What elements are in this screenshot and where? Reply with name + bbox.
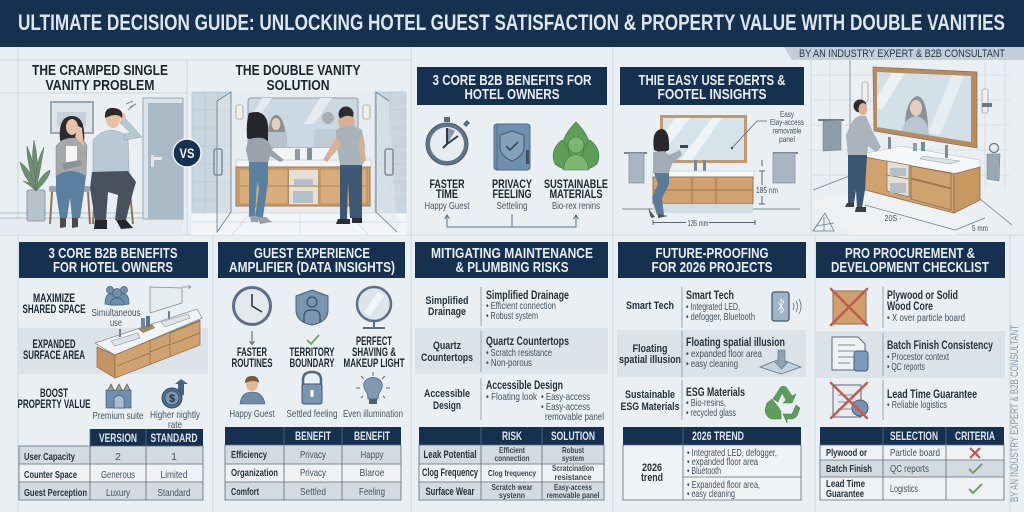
row: accessible design: • Floating look [486,391,538,403]
row: plywood core [887,288,965,324]
callout: removable panel: panel [779,134,795,144]
row: quartz countertops [421,334,569,369]
heading bar [415,242,608,278]
table: 2026 trend: • Expanded floor area, [687,479,760,491]
heading bar [417,67,607,105]
row: smart tech: Smart Tech [686,288,734,302]
icon: check [307,335,319,344]
row: floating spatial illusion: Floating [632,343,668,355]
row: plywood core: Plywood or Solid [887,288,958,302]
table: selection criteria: Guarantee [826,488,864,500]
icon: rising coin [162,379,188,408]
label: perfect light: PERFECT [356,334,392,348]
row: floating spatial illusion: • easy cleaning [686,358,738,370]
table: risk vs solution: connection [494,453,530,463]
heading bar: FOOTEL INSIGHTS [658,86,766,103]
heading: double vanity: THE DOUBLE VANITY [236,63,361,79]
panel: future proofing [617,242,806,500]
row: floating spatial illusion: • expanded floor area [686,348,762,360]
table: 2026 trend: trend [641,472,663,484]
label: boost property value: BOOST [40,386,68,400]
panel: mitigating maintenance [415,242,608,500]
heading: double vanity: SOLUTION [266,78,330,94]
row: plywood core: Wood Core [887,299,933,313]
table: version vs standard: Generous [101,469,135,481]
label: faster time: FASTER [430,177,465,191]
row: accessible design: Accessible [424,388,470,400]
table: risk vs solution: system [562,453,584,463]
illustration: frustrated couple in small room [0,98,183,235]
table: version vs standard: Standard [158,487,191,499]
table: risk vs solution: Scratcination [552,463,594,473]
row: esg materials: • recycled glass [686,407,736,419]
icon: privacy book with shield [494,124,530,170]
VS badge: VS [180,145,194,161]
panel: cramped single vanity problem [0,63,183,235]
table: selection criteria: Logistics [890,483,918,495]
label: faster routines: FASTER [237,345,267,359]
icon: rising coin: $ [169,393,175,405]
table: guest benefits: BENEFIT [354,431,390,443]
caption: higher nightly rate: Higher nightly [150,409,201,421]
row: lead time: • Reliable logistics [887,399,947,411]
icon: sustainable green figures [553,122,599,170]
row: esg materials: Sustainable [625,389,675,401]
callout: removable panel: Elay-access [770,117,804,127]
label: boost property value: PROPERTY VALUE [18,397,90,411]
captions: Happy Guest [230,408,275,420]
table: selection criteria: Particle board [890,447,940,459]
table: 2026 trend: • Integrated LED, defogger, [687,447,777,459]
icon: floating floor arrow [760,350,801,374]
panel: 3 core benefits (top) [417,67,608,227]
table: version vs standard: Guest Perception [24,487,87,499]
heading bar [218,242,405,278]
table: 2026 trend: • expanded floor area [687,456,758,468]
table: version vs standard: Counter Space [24,469,77,481]
heading: cramped single vanity: THE CRAMPED SINGLE [32,63,168,79]
row: accessible design: Design [433,400,461,412]
heading bar: 3 CORE B2B BENEFITS [48,245,178,262]
row: esg materials: ESG Materials [686,385,745,399]
dimension: height: 185 nm [756,185,778,195]
panel: 3 core benefits (bottom) [18,242,208,500]
row: lead time [887,387,977,411]
table: risk vs solution: resistance [554,472,592,482]
row: simplified drainage: Drainage [428,306,466,318]
table: risk vs solution: Efficient [499,445,525,455]
heading bar: AMPLIFIER (DATA INSIGHTS) [229,259,395,276]
icon: lock [302,372,322,404]
label: privacy feeling: FEELING [492,187,532,201]
row: esg materials: ESG Materials [620,401,680,413]
heading bar: FOR 2026 PROJECTS [652,259,772,276]
row: accessible design: removable panel [545,411,604,423]
heading bar: HOTEL OWNERS [464,86,560,103]
table: guest benefits: Organization [231,467,278,479]
callout: removable panel [731,109,804,149]
illustration: couple sharing a double vanity [192,92,406,235]
arrow: down [250,331,254,344]
table: version vs standard [19,429,203,500]
dimension: width: 135 mm [688,218,708,228]
table: selection criteria: Lead Time [826,478,865,490]
captions: Settled feeling [286,408,338,420]
table: version vs standard: Luxury [106,487,131,499]
heading bar [620,67,804,105]
row: quartz countertops: • Non-porous [486,357,532,369]
table: risk vs solution: Robust [562,445,584,455]
caption: simultaneous use: Simultaneous [92,307,140,319]
label: expanded surface area: SURFACE AREA [23,348,85,362]
table: 2026 trend: 2026 [642,462,662,474]
label: faster time [424,177,470,212]
label: perfect light: SHAVING & [352,345,396,359]
table: version vs standard: STANDARD [150,433,198,445]
row: smart tech: • defogger, Bluetooth [686,311,755,323]
VS badge [173,139,201,167]
label: sustainable materials: SUSTAINABLE [544,177,608,191]
row: quartz countertops: Quartz Countertops [486,334,569,348]
dimension: panel illustration width [865,205,988,233]
table: selection criteria: Batch Finish [826,463,872,475]
heading bar: FOR HOTEL OWNERS [53,259,173,276]
label: sustainable materials [544,177,608,212]
heading bar: & PLUMBING RISKS [456,259,568,276]
row: accessible design [424,378,604,423]
dimension: width [653,218,755,228]
heading bar: PRO PROCUREMENT & [845,245,975,262]
heading: cramped single vanity: VANITY PROBLEM [46,78,154,94]
label: sustainable materials: Bio-rex renins [552,200,600,212]
row: simplified drainage: Simplified [426,295,468,307]
dimension: height [756,160,778,204]
row: smart tech [626,288,755,323]
row: quartz countertops: Quartz [433,340,461,352]
heading bar [19,242,208,278]
label: faster time: TIME [436,187,458,201]
panel: easy use insights [620,67,804,228]
illustration: man at double vanity in perspective [810,60,1012,235]
heading bar: GUEST EXPERIENCE [254,245,370,262]
table: selection criteria: SELECTION [890,431,938,443]
label: maximize shared space: SHARED SPACE [22,302,86,316]
table: 2026 trend: • easy cleaning [687,488,735,500]
illustration: woman cleaning mirror at vanity [622,115,800,218]
vertical credit: BY AN INDUSTRY EXPERT & B2B CONSULTANT [1009,325,1021,502]
table: version vs standard: Limited [160,469,188,481]
row: simplified drainage: Simplified Drainage [486,288,569,302]
table: selection criteria: QC reports [890,463,929,475]
table: selection criteria: CRITERIA [955,431,995,443]
heading bar: 3 CORE B2B BENEFITS FOR [432,72,592,89]
table: selection criteria: Plywood or [826,447,867,459]
icon: premium suite [106,384,131,408]
table: guest benefits: BENEFIT [295,431,331,443]
icon: phone with bluetooth [772,292,801,321]
icon: crossed-out document and gear [831,383,868,418]
table: risk vs solution [419,427,604,500]
table: risk vs solution: Easy-access [554,482,592,492]
row: esg materials [620,385,745,419]
table: 2026 trend [623,427,801,500]
table: guest benefits [225,427,401,500]
row: batch finish [887,338,993,373]
caption: higher nightly rate: rate [168,419,182,431]
table: risk vs solution: RISK [502,431,522,443]
caption: premium suite: Premium suite [92,410,144,422]
label: privacy feeling: PRIVACY [492,177,532,191]
row: batch finish: • QC reports [887,361,925,373]
row: plywood core: • X over particle board [887,312,965,324]
label: faster time: Happy Guest [424,200,470,212]
icon: shield with person [296,290,328,325]
table: guest benefits: Happy [360,449,384,461]
row: accessible design: • Easy-access [541,401,590,413]
heading bar: FUTURE-PROOFING [656,245,768,262]
row: lead time: Lead Time Guarantee [887,387,977,401]
arrow bracket [444,214,578,227]
row: smart tech: Smart Tech [626,300,674,312]
icon: document and batch sample [832,337,868,371]
caption: simultaneous use: use [110,317,122,329]
callout: removable panel: removable [772,126,802,136]
icon: crossed-out particle board [831,289,867,325]
table: version vs standard: User Capacity [24,451,75,463]
dimension: panel illustration width: 20S · [884,213,902,223]
heading bar [618,242,806,278]
label: privacy feeling: Setteling [496,200,528,212]
label: maximize shared space: MAXIMIZE [33,291,75,305]
icon: level triangle [813,213,834,231]
icon: round mirror [357,287,391,328]
illustration: floating double vanity [95,285,202,378]
label: territory boundary: BOUNDARY [290,356,334,370]
icon: happy guest [240,376,265,404]
table: guest benefits: Efficiency [231,449,267,461]
captions [230,408,403,420]
row: quartz countertops: • Scratch resistance [486,347,552,359]
heading bar: THIE EASY USE FOERTS & [638,72,786,89]
table: risk vs solution: Clog Frequency [422,467,479,479]
table: risk vs solution: SOLUTION [551,431,595,443]
label: expanded surface area: EXPANDED [32,337,76,351]
table: risk vs solution: Leak Potential [424,449,476,461]
icon: clock [234,288,270,324]
table: risk vs solution: Clog frequency [488,468,536,478]
heading bar: MITIGATING MAINTENANCE [431,245,593,262]
panel: procurement checklist [815,242,1005,500]
panel: double vanity solution [192,63,406,235]
title banner [0,0,1024,47]
row: quartz countertops: Countertops [421,352,473,364]
panel: guest experience amplifier [218,242,405,500]
label: privacy feeling [492,177,532,212]
icon: light bulb [356,372,390,404]
row: floating spatial illusion: Floating spatial illusion [686,335,785,349]
row: simplified drainage: • Efficient connection [486,300,556,312]
table: risk vs solution: systenn [499,490,525,500]
table: guest benefits: Feeling [359,486,385,498]
row: smart tech: • Integrated LED, [686,301,740,313]
icon: stopwatch [426,117,470,165]
table: 2026 trend: • Bluetooth [687,465,721,477]
row: batch finish: • Procestor context [887,351,949,363]
table: version vs standard: 1 [171,451,177,463]
table: guest benefits: Privacy [300,467,327,479]
table: version vs standard: VERSION [99,433,137,445]
table: guest benefits: Privacy [300,449,327,461]
icon: recycling symbol [765,386,800,423]
dimension: panel illustration width: 5 mm [972,223,988,233]
label: perfect light: MAKEUP LIGHT [344,356,405,370]
table: guest benefits: Blaroe [360,467,385,479]
table: version vs standard: 2 [115,451,121,463]
row: simplified drainage [426,288,569,322]
icon: people group [105,286,129,305]
heading bar [816,242,1005,278]
table: risk vs solution: Scratch wear [492,482,533,492]
row: floating spatial illusion: spatial illusion [619,354,681,366]
table: risk vs solution: removable panel [546,490,600,500]
table: risk vs solution: Surface Wear [426,486,475,498]
table: guest benefits: Settled [300,486,326,498]
row: simplified drainage: • Robust system [486,310,538,322]
label: faster routines: ROUTINES [232,356,272,370]
callout: removable panel: Easy [780,109,795,119]
captions: Even illumination [343,408,403,420]
table: selection criteria [820,427,1004,500]
table: 2026 trend: 2026 TREND [692,431,744,443]
row: floating spatial illusion [619,335,785,370]
row: accessible design: Accessible Design [486,378,563,392]
row: accessible design: • Easy-access [541,391,590,403]
table: guest benefits: Comfort [231,486,259,498]
label: sustainable materials: MATERIALS [550,187,602,201]
row: esg materials: • Bio-resins, [686,397,726,409]
label: territory boundary: TERRITORY [290,345,334,359]
